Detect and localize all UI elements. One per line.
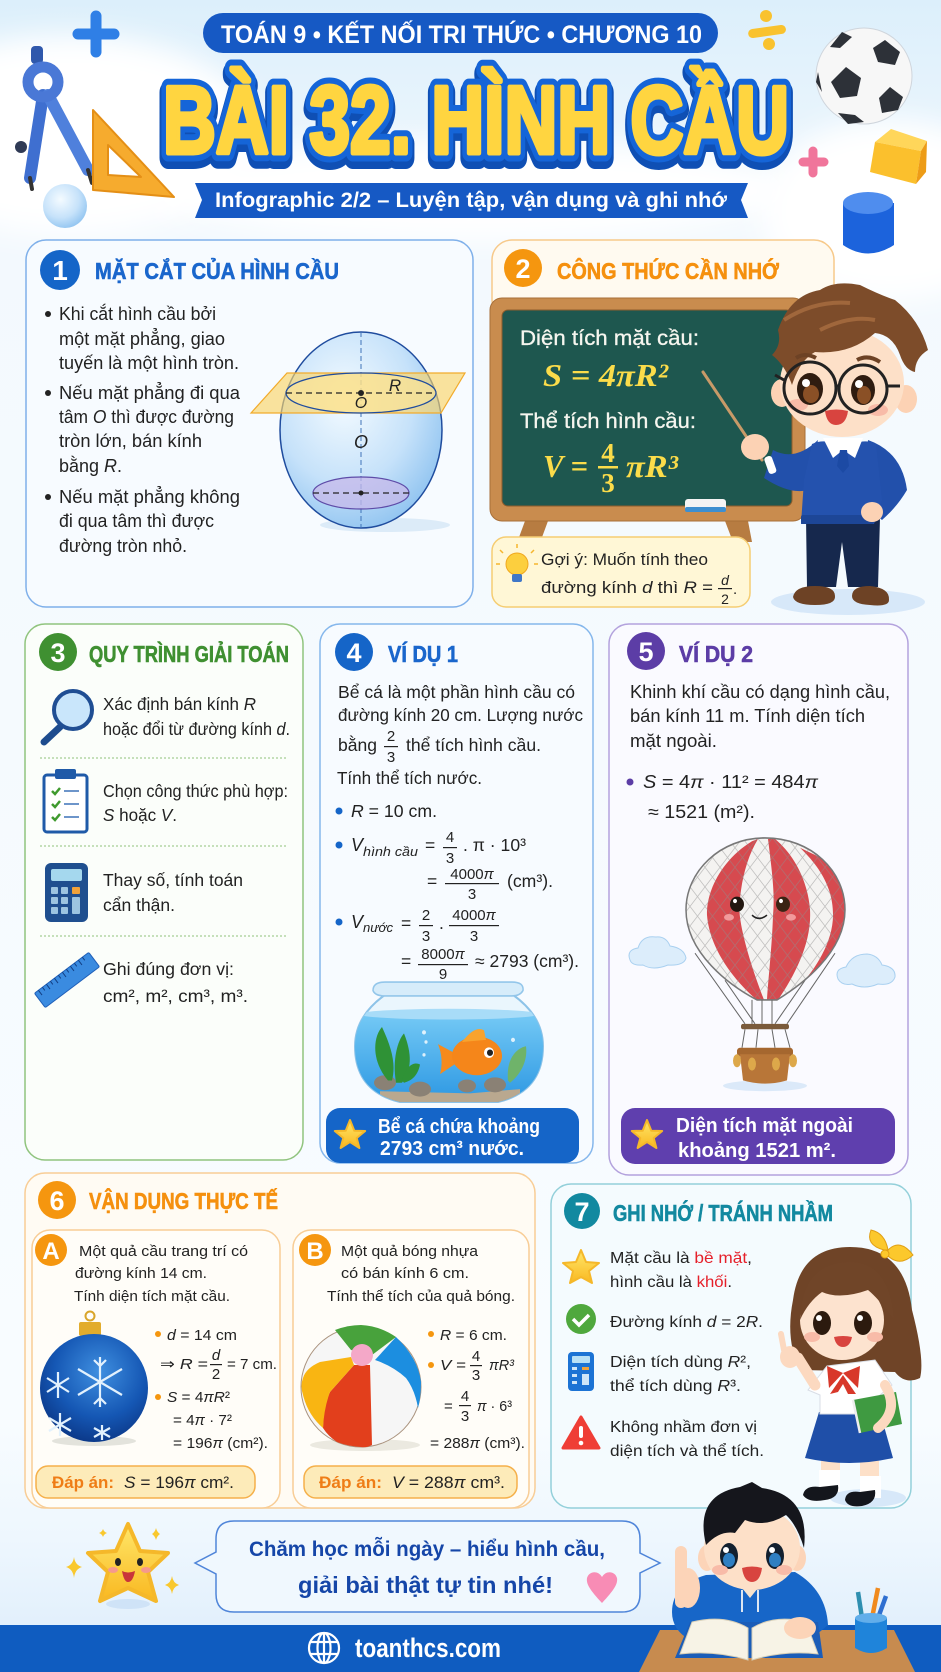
bullet text: đi qua tâm thì được — [59, 511, 214, 531]
problem statement: Khinh khí cầu có dạng hình cầu, — [630, 682, 890, 702]
step 2: Chọn công thức phù hợp: — [103, 781, 288, 801]
hint box — [492, 537, 750, 607]
badge 7: 7 — [574, 1197, 590, 1227]
step 2 — [44, 769, 288, 832]
website address: toanthcs.com — [355, 1633, 501, 1663]
solution steps: 4 — [446, 829, 454, 846]
bullet text: đường tròn nhỏ. — [59, 536, 187, 556]
diagram: sphere cross sections: R — [389, 376, 401, 395]
solution steps: 4000π — [450, 866, 495, 883]
diagram: sphere cross sections — [251, 332, 465, 532]
problem statement: 2 — [387, 728, 395, 745]
step 4: cm², m², cm³, m³. — [103, 986, 248, 1006]
illustration: clouds — [629, 937, 895, 987]
solution steps: 9 — [439, 966, 447, 983]
character: schoolgirl — [780, 1230, 921, 1507]
panel 2: công thức cần nhớ — [490, 240, 928, 615]
formula: volume: 3 — [601, 468, 615, 498]
problem statement: Bể cá là một phần hình cầu có — [338, 682, 575, 702]
callout: result: Bể cá chứa khoảng — [378, 1116, 540, 1138]
panel 5: ví dụ 2 — [609, 624, 908, 1175]
bullet text — [45, 303, 241, 556]
answer A: Đáp án: — [52, 1473, 114, 1492]
solution steps: ≈ 2793 (cm³). — [475, 951, 579, 971]
icon: soccer ball — [816, 28, 912, 124]
icon: pink plus — [803, 151, 824, 173]
bullet text: một mặt phẳng, giao — [59, 328, 225, 349]
blackboard: Thể tích hình cầu: — [520, 410, 696, 433]
problem statement — [337, 682, 583, 788]
note: diameter: Đường kính d = 2R. — [610, 1314, 763, 1331]
exercise B: Một quả bóng nhựa — [341, 1243, 479, 1260]
bullet text: tuyến là một hình tròn. — [59, 353, 239, 373]
exercise A: Tính diện tích mặt cầu. — [74, 1288, 230, 1305]
badge 4 — [335, 633, 373, 671]
badge 6: 6 — [49, 1186, 65, 1216]
callout: result: Diện tích mặt ngoài — [676, 1115, 853, 1137]
answer A: S = 196π cm². — [124, 1473, 234, 1492]
badge: course label pill: TOÁN 9 • KẾT NỐI TRI THỨC • CHƯƠNG 10 — [221, 19, 702, 49]
callout: result: 2793 cm³ nước. — [380, 1138, 524, 1160]
problem statement: thể tích hình cầu. — [406, 735, 541, 755]
header decorations — [15, 10, 927, 254]
green book — [853, 1392, 902, 1433]
solution A: = 196π (cm²). — [173, 1435, 268, 1452]
icon: star — [632, 1120, 662, 1148]
solution steps: 8000π — [421, 946, 466, 963]
solution steps — [336, 801, 579, 983]
icon: blue calculator — [568, 1352, 594, 1391]
solution B: = — [444, 1398, 453, 1415]
panel 3: quy trình giải toán — [25, 624, 303, 1160]
solution steps: 3 — [422, 928, 430, 945]
bullet text: Nếu mặt phẳng đi qua — [59, 382, 241, 403]
step 4: Ghi đúng đơn vị: — [103, 959, 234, 979]
exercise A: đường kính 14 cm. — [75, 1265, 207, 1282]
heading 5: VÍ DỤ 2 — [679, 640, 753, 667]
badge 1 — [40, 250, 80, 290]
solution B: 4 — [461, 1388, 469, 1405]
solution A: S = 4πR² — [167, 1389, 230, 1406]
note: units warning: Không nhầm đơn vị — [610, 1419, 757, 1436]
badge: course label pill — [203, 13, 718, 53]
dotted dividers — [40, 758, 288, 936]
problem statement: 3 — [387, 749, 395, 766]
step 1 — [44, 691, 290, 742]
icon: pencil cup — [855, 1588, 887, 1653]
icon: heart — [587, 1572, 617, 1603]
note: diameter — [566, 1304, 763, 1334]
solution B: 3 — [472, 1367, 480, 1384]
hint box: d — [721, 572, 730, 588]
bullet text: Nếu mặt phẳng không — [59, 486, 240, 507]
step 2: S hoặc V. — [103, 805, 177, 825]
badge B — [299, 1234, 331, 1266]
icon: globe — [309, 1633, 339, 1663]
problem statement: Tính thể tích nước. — [337, 768, 482, 788]
problem statement: mặt ngoài. — [630, 731, 717, 751]
solution steps: 3 — [468, 886, 476, 903]
solution steps: . — [439, 913, 444, 933]
icon: light bulb — [496, 544, 538, 582]
solution steps: hình cầu — [363, 844, 418, 859]
problem statement: ≈ 1521 (m²). — [648, 802, 755, 822]
icon: blue cylinder — [843, 192, 894, 254]
solution steps: nước — [363, 920, 394, 935]
step 3 — [45, 863, 243, 922]
problem statement: bằng — [338, 734, 377, 755]
solution B: π · 6³ — [477, 1398, 512, 1415]
diagram: sphere cross sections: O — [355, 395, 367, 412]
badge 4: 4 — [346, 638, 362, 668]
bullet text: tròn lớn, bán kính — [59, 431, 202, 451]
solution A: ⇒ R = — [160, 1356, 208, 1373]
icon: clipboard — [44, 769, 87, 832]
icon: divide sign — [748, 10, 787, 50]
solution steps: V — [351, 912, 365, 932]
panel 4: ví dụ 1 — [320, 624, 593, 1163]
icon: star — [563, 1250, 599, 1283]
step 1: hoặc đổi từ đường kính d. — [103, 719, 290, 739]
diagram: sphere cross sections: O — [354, 432, 368, 452]
yellow hair bow — [870, 1230, 913, 1261]
speech bubble: giải bài thật tự tin nhé! — [298, 1572, 553, 1598]
solution A: d — [212, 1347, 221, 1364]
note: surface vs solid: Mặt cầu là bề mặt, — [610, 1250, 752, 1267]
callout: result — [621, 1108, 895, 1164]
formula: volume — [543, 438, 678, 498]
icon: small glass sphere — [43, 184, 87, 228]
solution steps: = — [401, 913, 411, 933]
icon: blue plus — [78, 16, 114, 52]
panel 7: ghi nhớ / tránh nhầm — [551, 1184, 921, 1508]
illustration: fish bowl — [355, 982, 545, 1107]
heading 3: QUY TRÌNH GIẢI TOÁN — [89, 639, 289, 667]
panel 6: vận dụng thực tế — [25, 1173, 535, 1508]
subtitle ribbon: Infographic 2/2 – Luyện tập, vận dụng và ghi nhớ — [215, 189, 727, 212]
formula: surface area: S = 4πR² — [543, 357, 670, 393]
exercise A: Một quả cầu trang trí có — [79, 1243, 248, 1260]
note: surface vs solid: hình cầu là khối. — [610, 1274, 732, 1291]
solution steps: 2 — [422, 907, 430, 924]
solution B — [428, 1327, 525, 1452]
exercise A — [32, 1230, 280, 1508]
exercise B: có bán kính 6 cm. — [341, 1265, 469, 1282]
solution B: R = 6 cm. — [440, 1327, 507, 1344]
solution A: = 4π · 7² — [173, 1412, 232, 1429]
badge 3 — [39, 633, 77, 671]
icon: calculator — [45, 863, 88, 922]
answer A — [36, 1466, 255, 1498]
answer B: V = 288π cm³. — [392, 1473, 505, 1492]
speech bubble — [195, 1521, 660, 1612]
icon: magnifier — [44, 691, 92, 742]
solution B: 4 — [472, 1348, 480, 1365]
step 4 — [34, 952, 248, 1008]
character: teacher boy — [703, 283, 928, 615]
icon: star — [335, 1120, 365, 1148]
badge 3: 3 — [50, 638, 66, 668]
solution A: d = 14 cm — [167, 1327, 237, 1344]
note: units warning: diện tích và thể tích. — [610, 1442, 764, 1460]
problem statement: S = 4π · 11² = 484 π — [643, 772, 819, 792]
icon: warning triangle — [563, 1417, 599, 1448]
solution steps: R = 10 cm. — [351, 801, 437, 821]
bullet text: Khi cắt hình cầu bởi — [59, 303, 216, 324]
footer bar — [0, 1625, 941, 1672]
heading 4: VÍ DỤ 1 — [388, 640, 458, 667]
badge A: A — [42, 1238, 60, 1265]
note: units warning — [563, 1417, 764, 1460]
hint box: 2 — [721, 591, 729, 607]
open book — [675, 1619, 823, 1660]
exercise B: Tính thể tích của quả bóng. — [327, 1288, 515, 1305]
badge 1: 1 — [52, 255, 68, 286]
formula: volume: 4 — [601, 438, 615, 468]
solution steps: 3 — [446, 850, 454, 867]
blackboard: Diện tích mặt cầu: — [520, 327, 699, 350]
mascot: smiling star — [66, 1524, 179, 1609]
goldfish — [438, 1029, 502, 1075]
hint box: đường kính d thì R = — [541, 579, 713, 597]
icon: green check — [566, 1304, 596, 1334]
bullet text: tâm O thì được đường — [59, 407, 234, 427]
exercise B — [293, 1230, 529, 1508]
badge 6 — [38, 1181, 76, 1219]
icon: ruler — [34, 952, 100, 1008]
step 3: cẩn thận. — [103, 895, 175, 915]
formula: volume: V = — [543, 448, 588, 484]
panel 1: mặt cắt của hình cầu — [26, 240, 473, 607]
badge 7 — [564, 1193, 600, 1229]
hint box: Gợi ý: Muốn tính theo — [541, 551, 708, 569]
badge 2: 2 — [515, 254, 531, 284]
badge A — [35, 1234, 67, 1266]
problem statement: đường kính 20 cm. Lượng nước — [338, 705, 583, 725]
note: exponent: Diện tích dùng R², — [610, 1354, 751, 1371]
badge 5 — [627, 632, 665, 670]
icon: yellow cube — [870, 129, 927, 184]
eraser — [685, 499, 726, 512]
solution B: πR³ — [489, 1357, 515, 1374]
note: exponent — [568, 1352, 751, 1395]
solution steps: 4000π — [452, 907, 497, 924]
solution steps: (cm³). — [507, 871, 553, 891]
heading 1: MẶT CẮT CỦA HÌNH CẦU — [95, 256, 339, 284]
solution B: = 288π (cm³). — [430, 1435, 525, 1452]
solution steps: 3 — [470, 928, 478, 945]
heading 7: GHI NHỚ / TRÁNH NHẦM — [613, 1199, 833, 1226]
heading 2: CÔNG THỨC CẦN NHỚ — [557, 257, 779, 284]
solution steps: = — [401, 951, 411, 971]
blackboard — [490, 298, 805, 542]
solution B: 3 — [461, 1408, 469, 1425]
note: exponent: thể tích dùng R³. — [610, 1377, 741, 1395]
step 1: Xác định bán kính R — [103, 694, 256, 714]
solution B: V = — [440, 1357, 466, 1374]
badge B: B — [306, 1238, 324, 1265]
solution steps: V — [351, 835, 365, 855]
solution A — [155, 1327, 277, 1452]
answer B: Đáp án: — [319, 1473, 382, 1492]
icon: set square ruler — [93, 110, 174, 197]
illustration: christmas ornament — [40, 1312, 148, 1446]
note: surface vs solid — [563, 1250, 752, 1291]
icon: compass — [15, 46, 92, 189]
illustration: hot air balloon — [680, 834, 850, 1091]
subtitle ribbon — [195, 183, 748, 218]
formula: volume: πR³ — [626, 448, 678, 484]
callout: result: khoảng 1521 m². — [678, 1140, 836, 1162]
solution steps: = — [425, 835, 435, 855]
illustration: beach ball — [301, 1325, 421, 1451]
answer B — [304, 1466, 517, 1498]
callout: result — [326, 1108, 579, 1163]
badge 2 — [504, 249, 542, 287]
pointer stick — [703, 372, 762, 460]
step 3: Thay số, tính toán — [103, 870, 243, 890]
badge 5: 5 — [638, 637, 654, 667]
hint box: . — [733, 581, 737, 598]
bullet text: bằng R. — [59, 455, 122, 476]
solution steps: . π · 10³ — [463, 835, 526, 855]
problem statement — [626, 682, 890, 822]
speech bubble: Chăm học mỗi ngày – hiểu hình cầu, — [249, 1537, 605, 1561]
solution A: = 7 cm. — [227, 1356, 277, 1373]
heading 6: VẬN DỤNG THỰC TẾ — [89, 1187, 278, 1214]
problem statement: bán kính 11 m. Tính diện tích — [630, 706, 865, 726]
solution steps: = — [427, 871, 437, 891]
solution A: 2 — [212, 1366, 220, 1383]
character: studying boy with desk — [639, 1482, 915, 1672]
